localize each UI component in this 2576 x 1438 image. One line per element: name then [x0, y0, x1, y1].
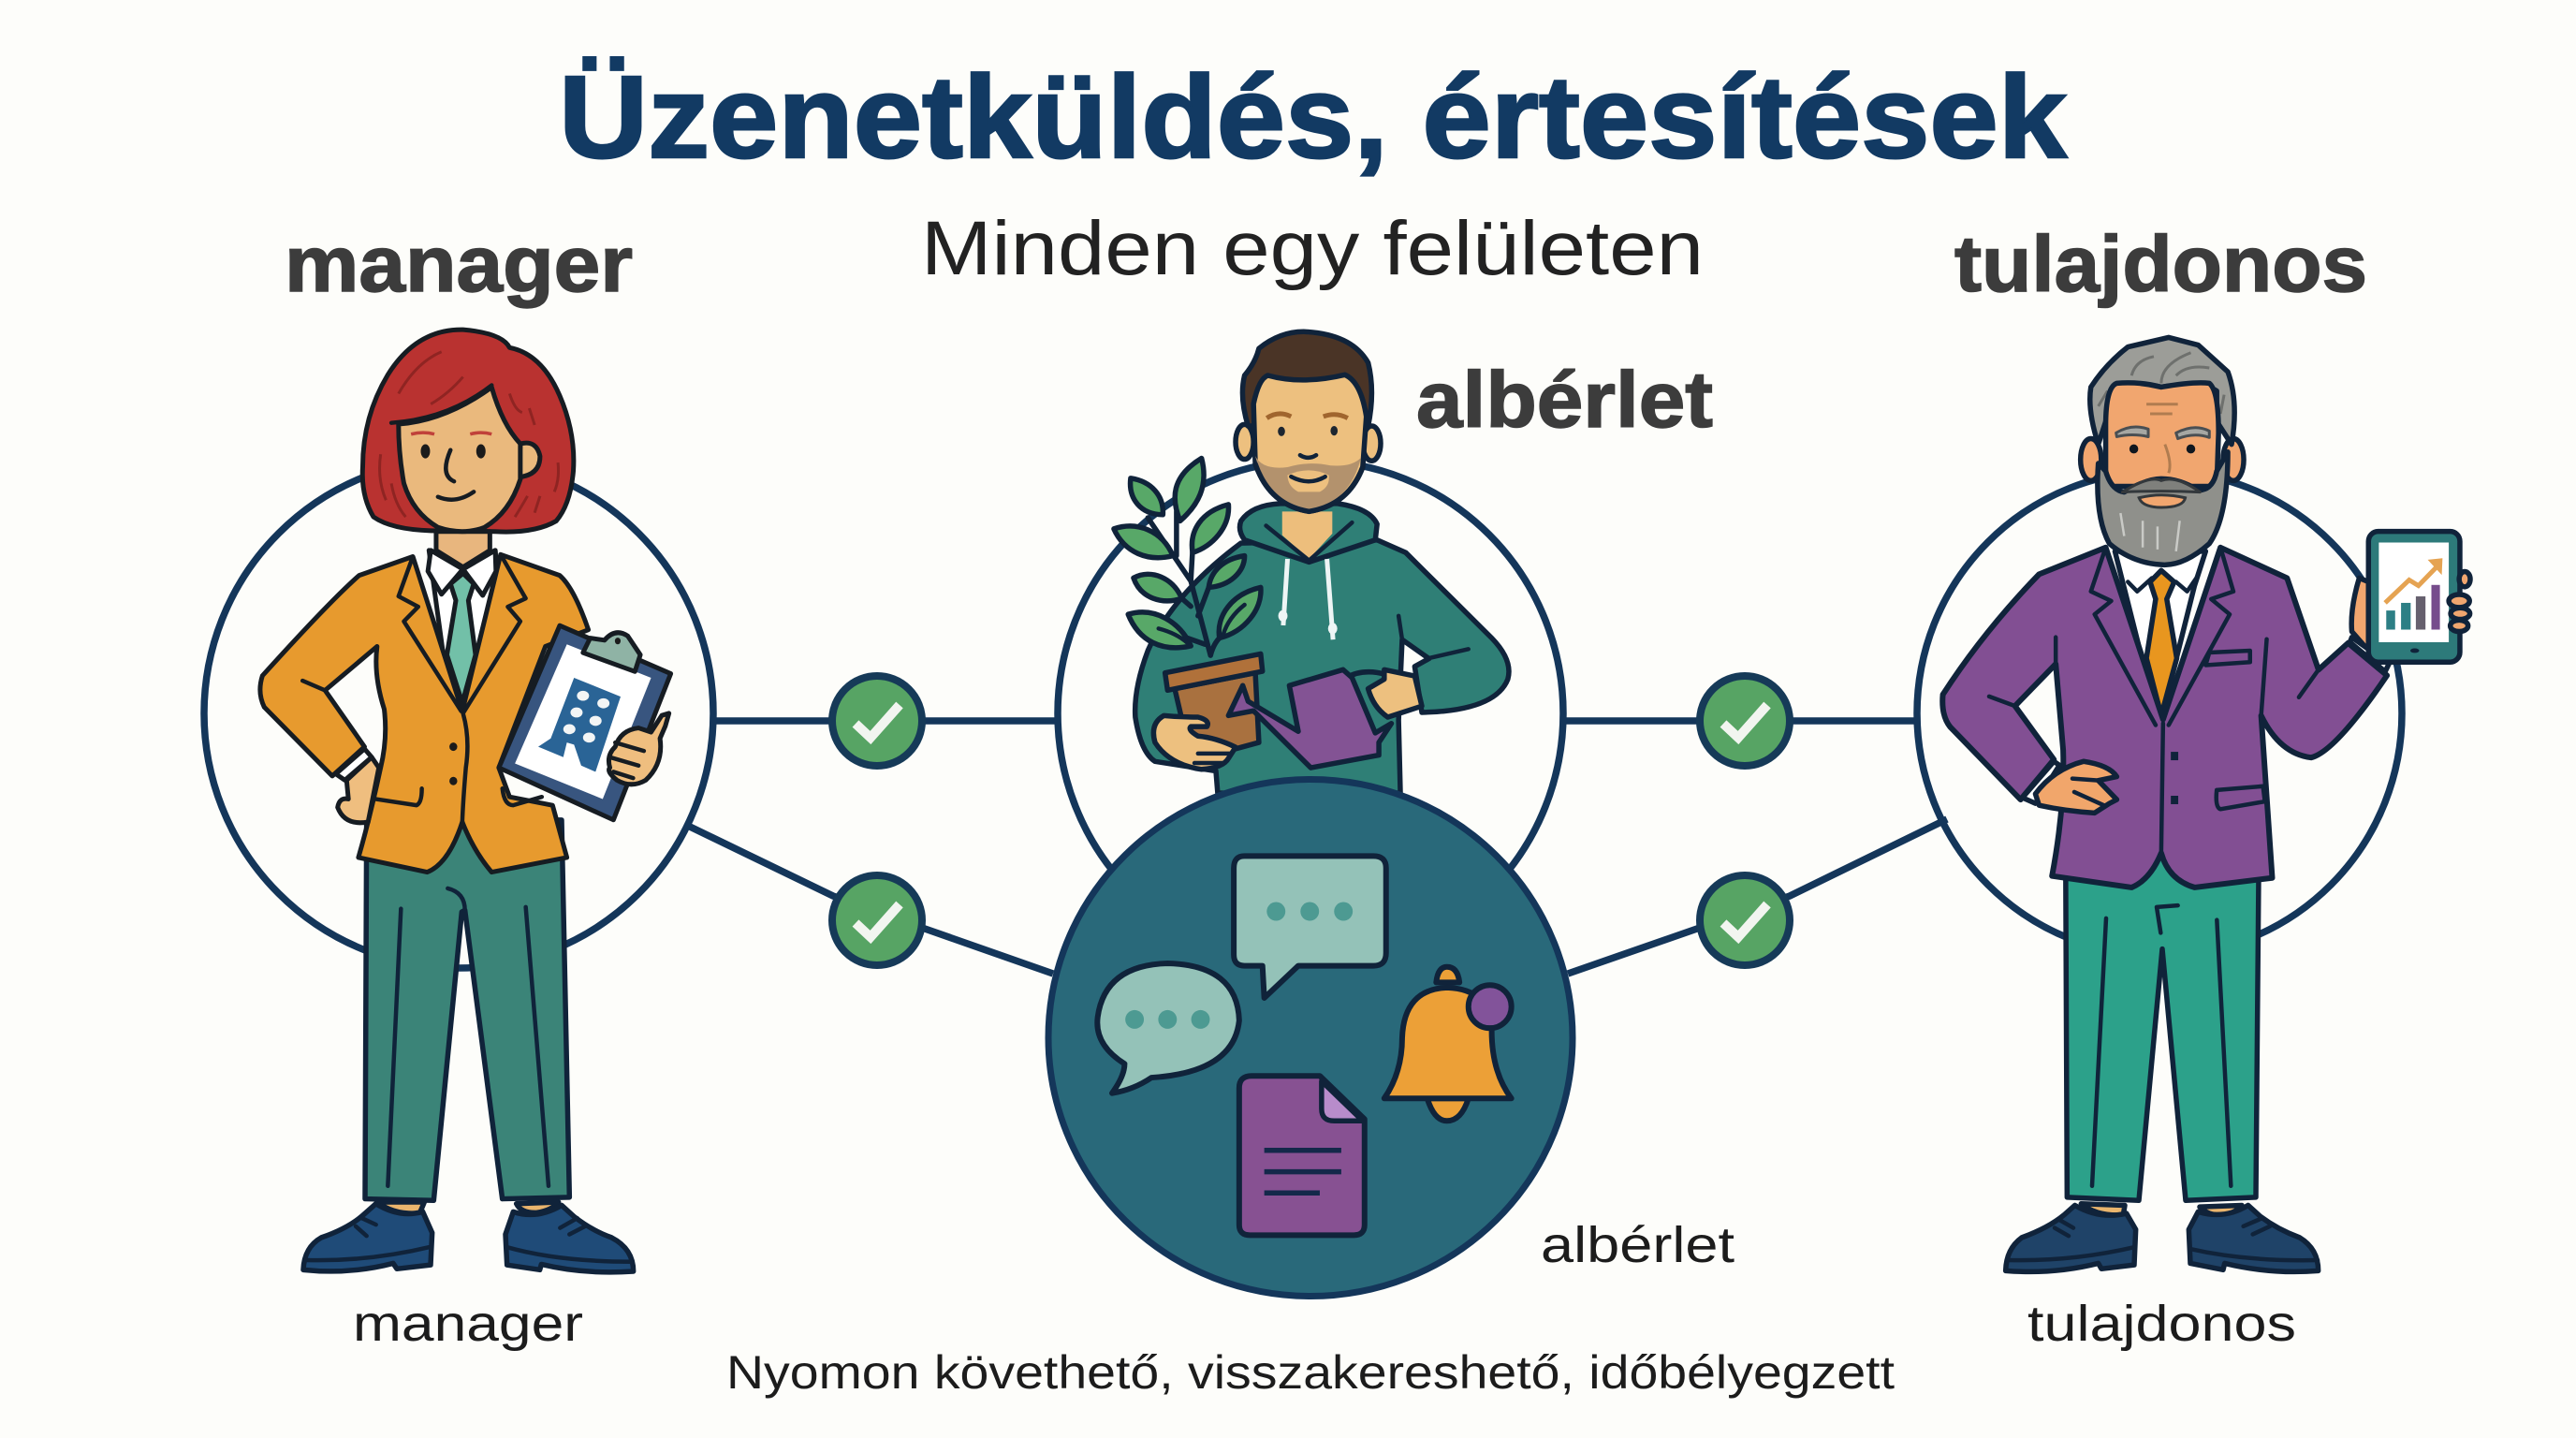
icon: rectangular chat bubble — [1234, 856, 1386, 998]
figure: manager woman — [260, 330, 671, 1272]
heading: albérlet: albérlet — [1416, 356, 1713, 444]
tenant ears — [1236, 424, 1381, 461]
manager face — [519, 443, 540, 477]
label: manager: manager — [353, 1296, 583, 1352]
icon: notification bell — [1384, 967, 1512, 1121]
heading: manager: manager — [285, 220, 633, 308]
check badge: hub owner — [1700, 875, 1790, 965]
manager hair — [362, 330, 574, 532]
icon: document — [1239, 1076, 1365, 1235]
icon: flower pot — [1165, 653, 1263, 749]
tenant right hand — [1368, 669, 1422, 717]
manager clipboard hand — [608, 713, 669, 785]
heading: tulajdonos: tulajdonos — [1954, 220, 2367, 308]
owner upper body and head — [1942, 337, 2470, 888]
manager hip hand — [338, 757, 379, 823]
footer note: Nyomon követhető, visszakereshető, időbélyegzett — [726, 1346, 1895, 1399]
message hub disc — [1048, 779, 1573, 1296]
check badge: manager tenant — [832, 676, 922, 766]
check badge: manager hub — [832, 875, 922, 965]
icon: watering can — [1228, 669, 1391, 768]
owner suit jacket — [1942, 548, 2387, 888]
figure: tenant man with plant and watering can — [1114, 331, 1509, 793]
check badge: tenant owner — [1700, 676, 1790, 766]
owner legs and shoes — [2006, 840, 2319, 1271]
subtitle: Minden egy felületen — [921, 206, 1704, 291]
icon: plant — [1114, 459, 1261, 655]
circle: tenant ring — [1058, 461, 1563, 966]
circle: manager ring — [204, 459, 713, 968]
tenant hoodie — [1135, 540, 1509, 793]
owner hair — [2090, 337, 2234, 445]
connector: manager to message hub — [690, 827, 1053, 974]
icon: oval chat bubble — [1097, 963, 1239, 1093]
owner ears — [2081, 439, 2244, 480]
label: albérlet: albérlet — [1541, 1217, 1734, 1273]
label: tulajdonos: tulajdonos — [2027, 1296, 2296, 1352]
manager legs and shoes — [303, 820, 634, 1272]
hub icons — [1097, 856, 1512, 1235]
tenant left hand — [1153, 715, 1236, 770]
tenant neck — [1282, 511, 1332, 559]
owner shirt — [2115, 551, 2205, 719]
icon: tablet with chart — [2368, 532, 2460, 662]
owner tablet hand fingers — [2449, 572, 2470, 632]
owner face — [2106, 383, 2218, 487]
connector: manager to tenant (top) — [713, 717, 1058, 725]
tenant beard — [1255, 456, 1361, 510]
tenant hood strings — [1279, 559, 1338, 639]
owner tie — [2146, 570, 2176, 715]
connector: message hub to owner — [1568, 819, 1947, 974]
figure: owner older man with tablet — [1942, 337, 2470, 1271]
manager shirt — [429, 550, 497, 709]
manager jacket — [260, 554, 589, 873]
manager tie — [446, 573, 476, 703]
owner beard — [2098, 452, 2228, 565]
tenant face — [1253, 374, 1367, 511]
circle: owner ring — [1917, 471, 2402, 956]
connector: tenant to owner (top) — [1563, 717, 1917, 725]
manager neck — [436, 532, 490, 567]
manager upper body and head — [260, 330, 671, 873]
tenant hood — [1239, 504, 1377, 562]
title: Üzenetküldés, értesítések — [559, 52, 2067, 183]
manager collar — [428, 550, 496, 595]
owner hip hand — [2023, 761, 2059, 803]
tenant hair — [1242, 331, 1371, 426]
icon: clipboard with building — [499, 625, 671, 820]
owner tablet hand thumb — [2351, 578, 2368, 651]
